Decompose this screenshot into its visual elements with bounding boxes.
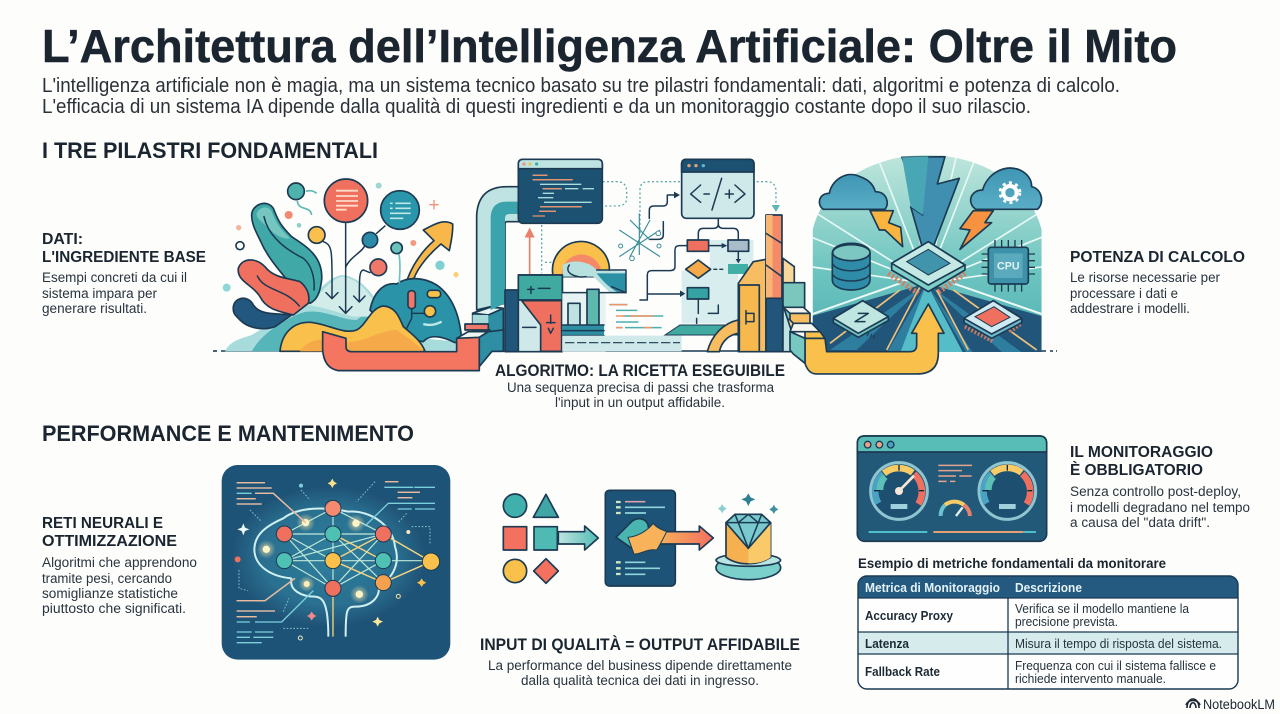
illustration: neural brain: [222, 465, 450, 660]
label: monitoraggio: Senza controllo post-deploy,: [1070, 484, 1241, 499]
sun dial: [552, 241, 626, 293]
heading: i tre pilastri: I TRE PILASTRI FONDAMENTALI: [42, 138, 378, 163]
label: reti neurali: RETI NEURALI E: [42, 515, 163, 532]
blob: navy: [233, 298, 292, 329]
label: reti neurali: Algoritmi che apprendono: [42, 555, 197, 570]
label: monitoraggio: IL MONITORAGGIO: [1070, 444, 1213, 461]
metrics table: Fallback Rate: [865, 665, 940, 679]
window header: [857, 436, 1047, 452]
label: monitoraggio: i modelli degradano nel tempo: [1070, 500, 1250, 515]
baseline rule: [213, 350, 1057, 352]
label: monitoraggio: [1070, 444, 1250, 530]
metrics table: Misura il tempo di risposta del sistema.: [1015, 637, 1222, 651]
brain outline: [254, 508, 397, 637]
arrow: salmon up: [526, 229, 533, 274]
text lines: [938, 465, 972, 481]
sparkles: [235, 479, 430, 640]
window: code symbols: [682, 159, 754, 218]
label: potenza di calcolo: Le risorse necessarie per: [1070, 270, 1220, 285]
cpu: CPU: [997, 260, 1020, 272]
bolt: central: [902, 157, 959, 260]
panel: [222, 465, 450, 660]
pipe: teal: [477, 187, 522, 310]
cloud: left: [819, 175, 887, 209]
label: dati: L'INGREDIENTE BASE: [42, 249, 206, 266]
table heading: Esempio di metriche fondamentali da monitorare: [858, 555, 1166, 571]
label: potenza di calcolo: POTENZA DI CALCOLO: [1070, 249, 1245, 266]
decorative dots: [223, 183, 459, 292]
label: input di qualità: La performance del business dipende direttamente: [488, 658, 792, 673]
steps: [457, 307, 503, 367]
label: dati: generare risultati.: [42, 301, 147, 316]
code traces: [237, 482, 435, 643]
label: reti neurali: [42, 515, 197, 616]
metrics table: Accuracy Proxy: [865, 609, 953, 623]
database: [832, 243, 870, 290]
illustration: input to output: [503, 490, 781, 586]
list lines: [609, 305, 663, 328]
label: potenza di calcolo: [1070, 249, 1245, 316]
illustration: dati: [223, 179, 503, 371]
arrow: teal: [558, 526, 598, 550]
illustration: algoritmo: [477, 159, 805, 352]
glow: [232, 487, 425, 627]
label: dati: sistema impara per: [42, 286, 157, 301]
label: algoritmo: ALGORITMO: LA RICETTA ESEGUIBILE: [495, 361, 785, 380]
document: [605, 490, 675, 586]
title: L’Architettura dell’Intelligenza Artificiale: Oltre il Mito: [42, 20, 1177, 72]
bolts: side: [870, 211, 903, 247]
cpu: [982, 240, 1035, 292]
arrow: salmon: [657, 526, 713, 550]
connector nodes: [288, 179, 419, 313]
window: [857, 436, 1047, 541]
fan background: [810, 153, 1043, 353]
intro text: L'efficacia di un sistema IA dipende dalla qualità di questi ingredienti e da un monitoraggio costante dopo il suo rilascio.: [42, 96, 1031, 118]
gem on pedestal: [716, 493, 781, 580]
small gauge: [941, 502, 970, 516]
label: monitoraggio: È OBBLIGATORIO: [1070, 460, 1203, 479]
label: algoritmo: [495, 361, 785, 410]
factory blocks: [505, 275, 682, 352]
notebooklm logo: NotebookLM: [1203, 697, 1275, 712]
cloud: right with gear: [971, 168, 1042, 209]
label: reti neurali: tramite pesi, cercando: [42, 571, 172, 586]
metrics table: Metrica di Monitoraggio: [865, 580, 1000, 595]
metrics table: richiede intervento manuale.: [1015, 672, 1166, 686]
label: potenza di calcolo: processare i dati e: [1070, 286, 1178, 301]
label: dati: [42, 231, 206, 316]
dome widgets: [407, 290, 442, 328]
blob: salmon: [238, 260, 309, 315]
label: algoritmo: Una sequenza precisa di passi che trasforma: [507, 380, 774, 395]
label: reti neurali: somiglianze statistiche: [42, 586, 178, 601]
metrics table: Frequenza con cui il sistema fallisce e: [1015, 659, 1216, 673]
circuit snowflake: [619, 213, 661, 261]
label: input di qualità: [480, 635, 800, 688]
window dots: [864, 441, 894, 448]
label: input di qualità: dalla qualità tecnica dei dati in ingresso.: [521, 673, 759, 688]
label: reti neurali: piuttosto che significati.: [42, 601, 186, 616]
pipe: salmon: [323, 332, 479, 371]
chip: central: [888, 242, 965, 293]
arrow: yellow rising: [407, 222, 453, 279]
metrics table: Verifica se il modello mantiene la: [1015, 602, 1189, 616]
illustration: monitoring dashboard: [857, 436, 1047, 541]
metrics table: Descrizione: [1015, 580, 1082, 595]
label: monitoraggio: a causa del "data drift".: [1070, 515, 1210, 530]
label: input di qualità: INPUT DI QUALITÀ = OUTPUT AFFIDABILE: [480, 635, 800, 654]
intro text: [42, 75, 1120, 118]
metrics table: Latenza: [865, 637, 910, 651]
blob: teal leaf: [252, 203, 322, 303]
illustration: potenza: [783, 153, 1043, 374]
ramp: [665, 325, 740, 335]
network links: [284, 508, 431, 588]
chip: small left: [833, 301, 888, 338]
dome: teal: [370, 279, 462, 343]
metrics table: precisione prevista.: [1015, 615, 1118, 629]
steps: right: [783, 307, 825, 363]
window: code: [518, 159, 602, 223]
gauge left: [871, 463, 927, 519]
flowchart: [640, 192, 749, 323]
heading: performance: PERFORMANCE E MANTENIMENTO: [42, 421, 414, 446]
bottom bars: [869, 529, 927, 535]
mound: pale teal: [225, 275, 457, 351]
panel: pale flow: [682, 240, 753, 323]
nodes: [276, 500, 440, 596]
blob: yellow: [280, 306, 425, 351]
chip: small right: [964, 301, 1022, 342]
intro text: L'intelligenza artificiale non è magia, ma un sistema tecnico basato su tre pilastri fondamentali: dati, algoritmi e potenza di calcolo.: [42, 75, 1120, 97]
dashed links: [542, 182, 776, 273]
gauge right: [979, 463, 1036, 519]
label: dati: Esempi concreti da cui il: [42, 270, 187, 285]
towers: [707, 215, 805, 352]
label: algoritmo: l'input in un output affidabile.: [555, 395, 725, 410]
label: potenza di calcolo: addestrare i modelli.: [1070, 301, 1190, 316]
metrics table: [858, 576, 1238, 689]
pipe arrow: yellow: [805, 304, 944, 374]
label: dati: DATI:: [42, 231, 83, 248]
label: reti neurali: OTTIMIZZAZIONE: [42, 533, 177, 550]
glowing dots: [257, 513, 369, 604]
shapes: [503, 494, 558, 583]
